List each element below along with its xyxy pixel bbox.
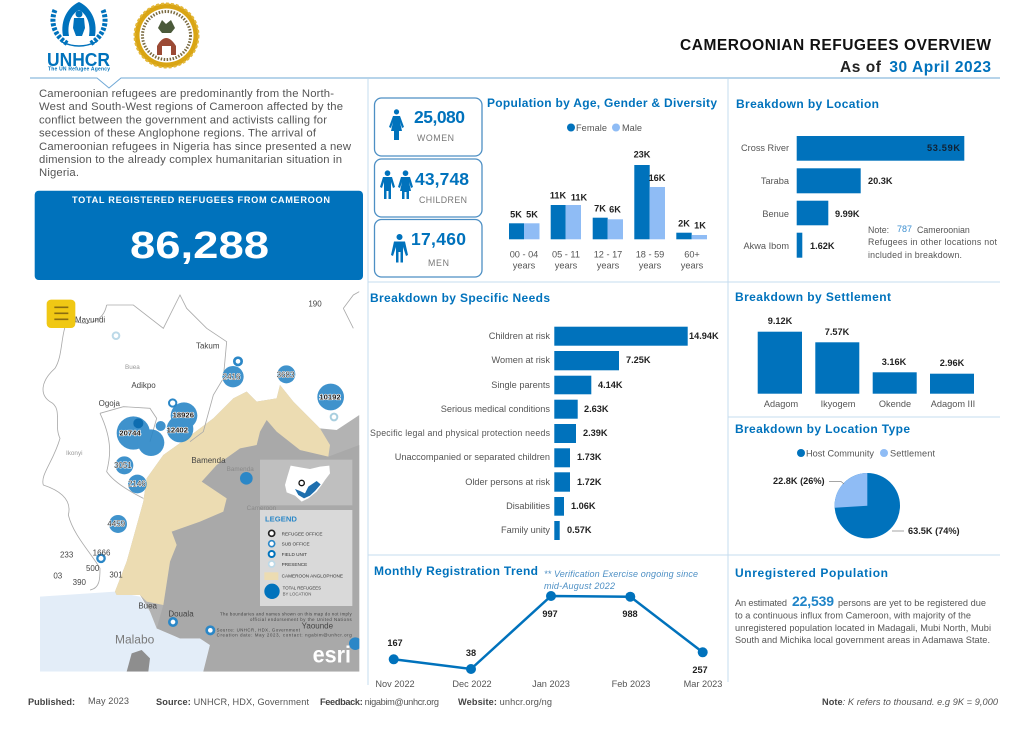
- line chart: [389, 591, 708, 674]
- values: 1.72K: [577, 477, 602, 487]
- map: Yaounde: [302, 621, 334, 630]
- bars: [554, 327, 688, 540]
- map: Adikpo: [131, 381, 156, 390]
- location labels: Cross River: [741, 143, 789, 153]
- total refugees card: 86,288: [130, 225, 269, 267]
- map: 301: [109, 571, 123, 580]
- stat: children: 43,748: [415, 169, 469, 189]
- map: Bamenda: [227, 466, 254, 473]
- map: 10192: [319, 393, 341, 402]
- location labels: Benue: [762, 209, 789, 219]
- map: 1666: [93, 549, 111, 558]
- age labels: 12 - 17: [594, 250, 622, 260]
- map legend: REFUGEE OFFICE: [282, 531, 323, 536]
- stat: men: MEN: [428, 258, 449, 268]
- value labels: 5K: [526, 210, 538, 220]
- value labels: 16K: [649, 173, 666, 183]
- location labels: [741, 143, 790, 251]
- month labels: Dec 2022: [452, 679, 492, 689]
- age labels: years: [555, 260, 578, 270]
- intro text: Cameroonian refugees in Nigeria has since presented a new: [39, 141, 352, 153]
- description: An estimated: [735, 598, 787, 608]
- values: 1.06K: [571, 501, 596, 511]
- description: South and Michika local government areas in Adamawa State.: [735, 635, 990, 645]
- category labels: Older persons at risk: [465, 477, 550, 487]
- location labels: Taraba: [761, 176, 790, 186]
- map: 3051: [114, 461, 132, 470]
- values: 0.57K: [567, 525, 592, 535]
- note: [868, 224, 998, 260]
- bars: [797, 136, 964, 258]
- value labels: 2K: [678, 218, 690, 228]
- point values: 997: [542, 609, 558, 619]
- age labels: 05 - 11: [552, 250, 580, 260]
- map: Source: UNHCR, HDX, Government: [217, 628, 301, 633]
- pie chart: [829, 473, 904, 538]
- values: 20.3K: [868, 176, 893, 186]
- intro text: conflict between the government and activists calling for: [39, 114, 327, 126]
- footer: Published:: [28, 697, 75, 707]
- footer: Note: K refers to thousand. e.g 9K = 9,000: [822, 697, 999, 707]
- intro text: West and South-West regions of Cameroon affected by the: [39, 101, 343, 113]
- category labels: Unaccompanied or separated children: [395, 452, 550, 462]
- intro text: secession of these Anglophone regions. The arrival of: [39, 128, 317, 140]
- values: 53.59K: [927, 143, 960, 153]
- category labels: Family unity: [501, 525, 550, 535]
- map: Douala: [168, 610, 194, 619]
- map: 3683: [277, 370, 295, 379]
- map: Mayundi: [75, 316, 105, 325]
- values: 4.14K: [598, 380, 623, 390]
- description: unregistered population located in Madagali, Mubi North, Mubi: [735, 623, 991, 633]
- values: 2.63K: [584, 404, 609, 414]
- category labels: [370, 331, 551, 535]
- map: Ikonyi: [66, 450, 83, 457]
- map legend: BY LOCATION: [283, 591, 311, 596]
- heading: Breakdown by Location: [736, 97, 879, 111]
- title: CAMEROONIAN REFUGEES OVERVIEW: [680, 37, 991, 54]
- age labels: years: [681, 260, 704, 270]
- map: [40, 285, 362, 672]
- pie labels: 63.5K (74%): [908, 526, 960, 536]
- intro text: Cameroonian refugees are predominantly from the North-: [39, 88, 334, 100]
- heading: Breakdown by Location Type: [735, 422, 910, 436]
- heading: Breakdown by Specific Needs: [370, 291, 550, 305]
- panel: settlement: [735, 290, 975, 409]
- stat: men: 17,460: [411, 229, 466, 249]
- pie labels: 22.8K (26%): [773, 476, 825, 486]
- category labels: Disabilities: [506, 501, 550, 511]
- map: 233: [60, 550, 74, 559]
- map: 20744: [119, 429, 141, 438]
- footer: May 2023: [88, 696, 129, 706]
- stat: women: 25,080: [414, 107, 465, 127]
- point values: 988: [622, 609, 638, 619]
- panel: population by age and gender: [487, 96, 717, 270]
- value labels: 23K: [634, 150, 651, 160]
- stat: men: [374, 220, 482, 277]
- values: 2.39K: [583, 428, 608, 438]
- stat: children: [374, 159, 482, 217]
- legend: Settlement: [890, 448, 935, 458]
- legend: Male: [622, 123, 642, 133]
- point values: 167: [387, 638, 403, 648]
- values: 2.96K: [940, 358, 965, 368]
- heading: Breakdown by Settlement: [735, 290, 891, 304]
- category labels: Women at risk: [491, 355, 550, 365]
- heading: Monthly Registration Trend: [374, 564, 538, 578]
- panel: breakdown by location: [736, 97, 998, 260]
- verification note: [544, 569, 698, 591]
- map: Ogoja: [99, 399, 121, 408]
- map: Buea: [138, 602, 158, 611]
- logo: UNHCR: [47, 2, 110, 72]
- category labels: Single parents: [491, 380, 550, 390]
- bars: [758, 332, 974, 394]
- total refugees card: [35, 191, 363, 280]
- values: 3.16K: [882, 357, 907, 367]
- month labels: Jan 2023: [532, 679, 570, 689]
- value labels: 11K: [550, 190, 567, 200]
- point values: 38: [466, 648, 476, 658]
- intro text: [39, 88, 352, 179]
- value labels: [510, 150, 706, 230]
- map legend: CAMEROON ANGLOPHONE: [282, 573, 343, 578]
- map: Malabo: [115, 632, 155, 646]
- map menu button: [47, 300, 75, 328]
- settlement names: Ikyogem: [821, 399, 856, 409]
- map legend: PRESENCE: [282, 562, 307, 567]
- map: 2146: [128, 480, 146, 489]
- age labels: [510, 250, 704, 270]
- total refugees card: TOTAL REGISTERED REFUGEES FROM CAMEROON: [72, 195, 330, 205]
- panel: location type: [735, 422, 960, 538]
- value labels: 6K: [609, 204, 621, 214]
- logo: UNHCR: UNHCR: [47, 50, 110, 70]
- legend: Host Community: [806, 448, 874, 458]
- pie labels: [773, 476, 960, 536]
- settlement names: [764, 399, 975, 409]
- age labels: 60+: [684, 250, 700, 260]
- map legend: LEGEND: [265, 515, 297, 524]
- map legend: FIELD UNIT: [282, 552, 307, 557]
- footer: Source: UNHCR, HDX, Government: [156, 697, 309, 707]
- logo: UNHCR: The UN Refugee Agency: [48, 66, 110, 72]
- map: Cameroon: [247, 505, 277, 512]
- esri badge: esri: [313, 641, 351, 667]
- description: 22,539: [792, 593, 834, 609]
- legend: [797, 448, 935, 458]
- point values: [387, 609, 708, 675]
- map legend: SUB OFFICE: [282, 542, 310, 547]
- footer: Feedback: nigabim@unhcr.org: [320, 697, 439, 707]
- category labels: Specific legal and physical protection needs: [370, 428, 551, 438]
- values: 1.73K: [577, 452, 602, 462]
- values: 9.99K: [835, 209, 860, 219]
- month labels: [375, 679, 722, 689]
- values: [567, 331, 719, 535]
- value labels: 11K: [571, 192, 588, 202]
- age labels: 00 - 04: [510, 250, 538, 260]
- note: Cameroonian: [917, 225, 970, 235]
- report date: As of 30 April 2023: [840, 59, 991, 76]
- legend: [567, 123, 642, 133]
- month labels: Mar 2023: [684, 679, 722, 689]
- region: Cameroon anglophone area: [115, 385, 330, 605]
- settlement names: Adagom: [764, 399, 798, 409]
- panel: unregistered population: [735, 566, 991, 645]
- note: Note:: [868, 225, 889, 235]
- values: 14.94K: [689, 331, 719, 341]
- map: 390: [73, 578, 87, 587]
- settlement names: Okende: [879, 399, 911, 409]
- map: 2416: [223, 373, 241, 382]
- map inset: Nigeria locator: [260, 460, 352, 505]
- values: [768, 316, 965, 368]
- age labels: years: [639, 260, 662, 270]
- value labels: 7K: [594, 204, 606, 214]
- map: 500: [86, 564, 100, 573]
- map: 03: [53, 571, 63, 580]
- map: Bamenda: [191, 456, 226, 465]
- note: included in breakdown.: [868, 250, 962, 260]
- map: Buea: [125, 364, 140, 371]
- month labels: Nov 2022: [375, 679, 415, 689]
- verification note: ** Verification Exercise ongoing since: [544, 569, 698, 579]
- point values: 257: [692, 665, 708, 675]
- map: Takum: [196, 341, 220, 350]
- stat: women: WOMEN: [417, 133, 454, 143]
- map: 12402: [167, 425, 188, 434]
- map: 18926: [173, 411, 194, 420]
- value labels: 1K: [694, 220, 706, 230]
- value labels: 5K: [510, 210, 522, 220]
- description: to a continuous influx from Cameroon, with majority of the: [735, 610, 971, 620]
- footer: [28, 696, 999, 707]
- location labels: Akwa Ibom: [744, 241, 789, 251]
- map: Creation date: May 2023, contact: ngabim@unhcr.org: [217, 633, 352, 638]
- values: [810, 143, 960, 251]
- legend: Female: [576, 123, 607, 133]
- logo: government seal: [134, 4, 198, 68]
- month labels: Feb 2023: [612, 679, 650, 689]
- bars: [509, 165, 692, 239]
- values: 9.12K: [768, 316, 793, 326]
- map legend: [260, 510, 352, 606]
- intro text: dimension to the already complex humanitarian situation in: [39, 154, 342, 166]
- heading: Population by Age, Gender & Diversity: [487, 96, 717, 110]
- age labels: years: [513, 260, 536, 270]
- footer: Website: unhcr.org/ng: [458, 697, 552, 707]
- stat: children: CHILDREN: [419, 195, 467, 205]
- values: 1.62K: [810, 241, 835, 251]
- intro text: Nigeria.: [39, 167, 79, 179]
- age labels: 18 - 59: [636, 250, 664, 260]
- map: official endorsement by the United Nations: [250, 617, 352, 622]
- stat: women: [374, 98, 482, 156]
- heading: Unregistered Population: [735, 566, 888, 580]
- category labels: Children at risk: [489, 331, 550, 341]
- description: [735, 593, 991, 645]
- age labels: years: [597, 260, 620, 270]
- category labels: Serious medical conditions: [441, 404, 550, 414]
- map: 190: [308, 300, 322, 309]
- values: 7.25K: [626, 355, 651, 365]
- map legend: TOTAL REFUGEES: [283, 586, 321, 591]
- panel: monthly trend: [374, 564, 722, 689]
- settlement names: Adagom III: [931, 399, 975, 409]
- description: persons are yet to be registered due: [838, 598, 986, 608]
- map: 4459: [107, 520, 126, 529]
- panel: specific needs: [370, 291, 719, 540]
- note: 787: [897, 224, 912, 234]
- verification note: mid-August 2022: [544, 581, 615, 591]
- map: The boundaries and names shown on this map do not imply: [220, 612, 352, 617]
- note: Refugees in other locations not: [868, 237, 998, 247]
- values: 7.57K: [825, 327, 850, 337]
